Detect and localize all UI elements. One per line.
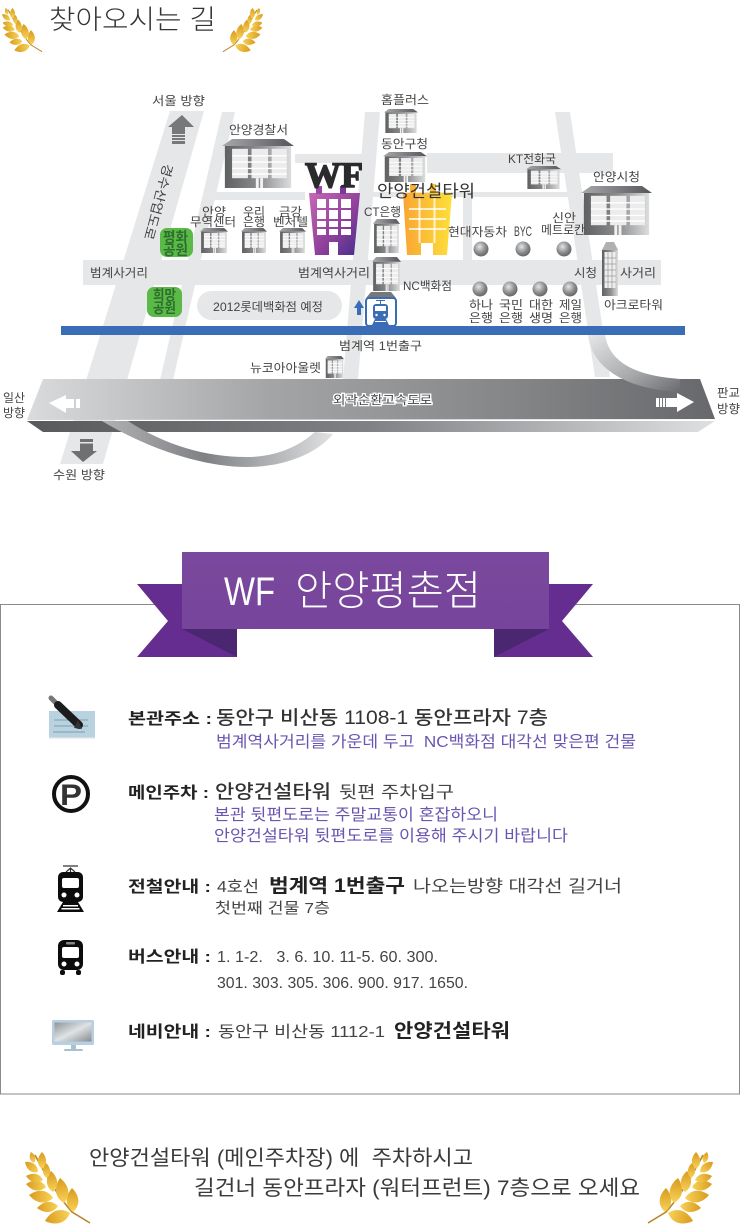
map labels: 안양건설타워: [377, 182, 475, 201]
map labels: 아크로타워: [604, 298, 663, 312]
arrow: east: [656, 393, 694, 412]
map labels: 제일: [559, 298, 582, 312]
map labels: 안양경찰서: [229, 123, 288, 137]
row: subway: 첫번째 건물 7층: [215, 900, 330, 917]
building: homeplus: [384, 109, 418, 133]
map labels: 안양시청: [593, 170, 640, 184]
parks: 공원: [163, 242, 188, 258]
title: 찾아오시는 길: [49, 5, 216, 35]
map labels: 시청: [574, 266, 597, 280]
icon: laurel bottom left: [23, 1151, 90, 1227]
right ramp: [588, 335, 680, 392]
row: navigation: [52, 1020, 510, 1051]
map labels: 범계역 1번출구: [339, 339, 422, 353]
building: NC department store: [372, 257, 401, 291]
row: navigation: 네비안내 :: [128, 1023, 211, 1041]
row: bus: 301. 303. 305. 306. 900. 917. 1650.: [217, 975, 468, 992]
arrow: station exit: [354, 300, 364, 315]
row: subway: [57, 866, 622, 917]
building: Anyang construction tower: [403, 184, 452, 255]
map labels: 신안: [552, 211, 576, 225]
banner ribbon: [137, 552, 593, 657]
icon: bus: [58, 940, 83, 975]
map labels: 무역센터: [190, 215, 236, 229]
parks: [147, 228, 193, 317]
row: subway: 범계역 1번출구: [269, 875, 405, 897]
row: address: [49, 698, 636, 751]
row: bus: 버스안내 :: [128, 948, 211, 966]
map labels: BYC: [514, 223, 532, 239]
building: dongan office: [383, 152, 427, 182]
banner title: WF: [224, 570, 275, 614]
panel: store info: [0, 604, 740, 1094]
arrow: west: [49, 395, 80, 413]
POI spheres: [472, 242, 578, 296]
map labels: 뉴코아아울렛: [250, 361, 321, 375]
blue subway line: [61, 326, 685, 335]
footer text: 안양건설타워 (메인주차장) 에 주차하시고: [89, 1147, 473, 1170]
left ramp: [102, 421, 333, 467]
map labels: 수원 방향: [53, 468, 105, 482]
map labels: CT은행: [364, 204, 401, 219]
footer text: [89, 1147, 640, 1200]
parks: 평화: [163, 229, 188, 245]
parks: 희망: [153, 287, 176, 303]
map labels: 홈플러스: [381, 93, 429, 107]
icon: pen and check: [49, 698, 95, 738]
banner title: 안양평촌점: [295, 568, 481, 614]
highway: [27, 379, 715, 432]
row: main parking: 뒷편 주차입구: [339, 783, 454, 802]
map labels: 은행: [243, 214, 265, 229]
row: navigation: 안양건설타워: [394, 1020, 510, 1042]
map labels: 은행: [469, 310, 493, 325]
row: main parking: 본관 뒷편도로는 주말교통이 혼잡하오니: [214, 806, 498, 824]
location map: [3, 93, 740, 482]
row: subway: 4호선: [217, 878, 259, 896]
icon: monitor: [52, 1020, 94, 1051]
building: geumgang: [279, 228, 306, 253]
building: city hall: [581, 186, 652, 235]
arrow: south: [71, 439, 97, 462]
row: address: 범계역사거리를 가운데 두고 NC백화점 대각선 맞은편 건물: [216, 733, 636, 751]
icon: laurel bottom right: [648, 1151, 715, 1227]
map labels: 경수산업도로: [141, 162, 176, 241]
row: main parking: 안양건설타워 뒷편도로를 이용해 주시기 바랍니다: [214, 827, 568, 845]
map labels: 대한: [529, 298, 553, 312]
map labels: 방향: [717, 402, 740, 416]
map labels: 판교: [717, 386, 740, 400]
subway station icon: [366, 292, 396, 326]
building: woori bank: [241, 228, 267, 253]
map labels: 금강: [279, 205, 302, 219]
roads: [60, 111, 661, 464]
building: WF: [309, 186, 360, 255]
map labels: 국민: [499, 298, 523, 312]
map labels: 현대자동차: [448, 225, 507, 239]
row: address: 본관주소 :: [128, 710, 212, 728]
map labels: 은행: [559, 310, 582, 325]
map labels: 방향: [3, 406, 25, 420]
map labels: 서울 방향: [152, 94, 205, 108]
icon: parking: P: [60, 779, 82, 812]
icon: parking: [54, 777, 88, 812]
row: main parking: 메인주차 :: [128, 784, 209, 802]
map labels: 은행: [499, 310, 523, 325]
map labels: NC백화점: [403, 279, 452, 293]
map labels: 우리: [243, 205, 265, 219]
row: address: 동안구 비산동 1108-1 동안프라자 7층: [216, 707, 548, 729]
row: subway: 전철안내 :: [128, 878, 211, 896]
map labels: 동안구청: [381, 137, 428, 151]
building: newcore: [325, 356, 344, 378]
arrow: north: [168, 115, 194, 144]
map labels: 생명: [529, 311, 553, 325]
map labels: 사거리: [620, 266, 656, 280]
map labels: 벤처텔: [273, 215, 308, 229]
icon: train: [57, 866, 84, 912]
footer text: 길건너 동안프라자 (워터프런트) 7층으로 오세요: [194, 1177, 640, 1200]
map labels: 하나: [469, 298, 493, 312]
building: KT: [526, 166, 561, 189]
icon: laurel left: [1, 8, 42, 54]
map labels: 범계사거리: [90, 266, 148, 280]
building: police: [222, 139, 294, 188]
row: navigation: 동안구 비산동 1112-1: [218, 1023, 385, 1041]
map labels: 2012롯데백화점 예정: [213, 300, 323, 314]
parks: 공원: [153, 300, 176, 316]
icon: laurel right: [223, 8, 264, 54]
building: trade center: [200, 228, 228, 253]
map labels: [3, 93, 740, 482]
building: acro tower: [602, 242, 618, 296]
row: main parking: [54, 777, 568, 845]
row: bus: 1. 1-2. 3. 6. 10. 11-5. 60. 300.: [217, 949, 438, 966]
map labels: 범계역사거리: [298, 266, 370, 280]
map labels: 외곽순환고속도로: [333, 393, 432, 407]
row: subway: 나오는방향 대각선 길거너: [413, 877, 622, 896]
building: CT bank: [373, 219, 400, 253]
map labels: 안양: [202, 205, 226, 219]
row: main parking: 안양건설타워: [215, 781, 331, 803]
map labels: KT전화국: [508, 152, 556, 166]
row: bus: [58, 940, 468, 992]
WF logo: WF: [305, 155, 363, 195]
map labels: 메트로칸: [541, 223, 585, 237]
map labels: 일산: [3, 391, 25, 405]
